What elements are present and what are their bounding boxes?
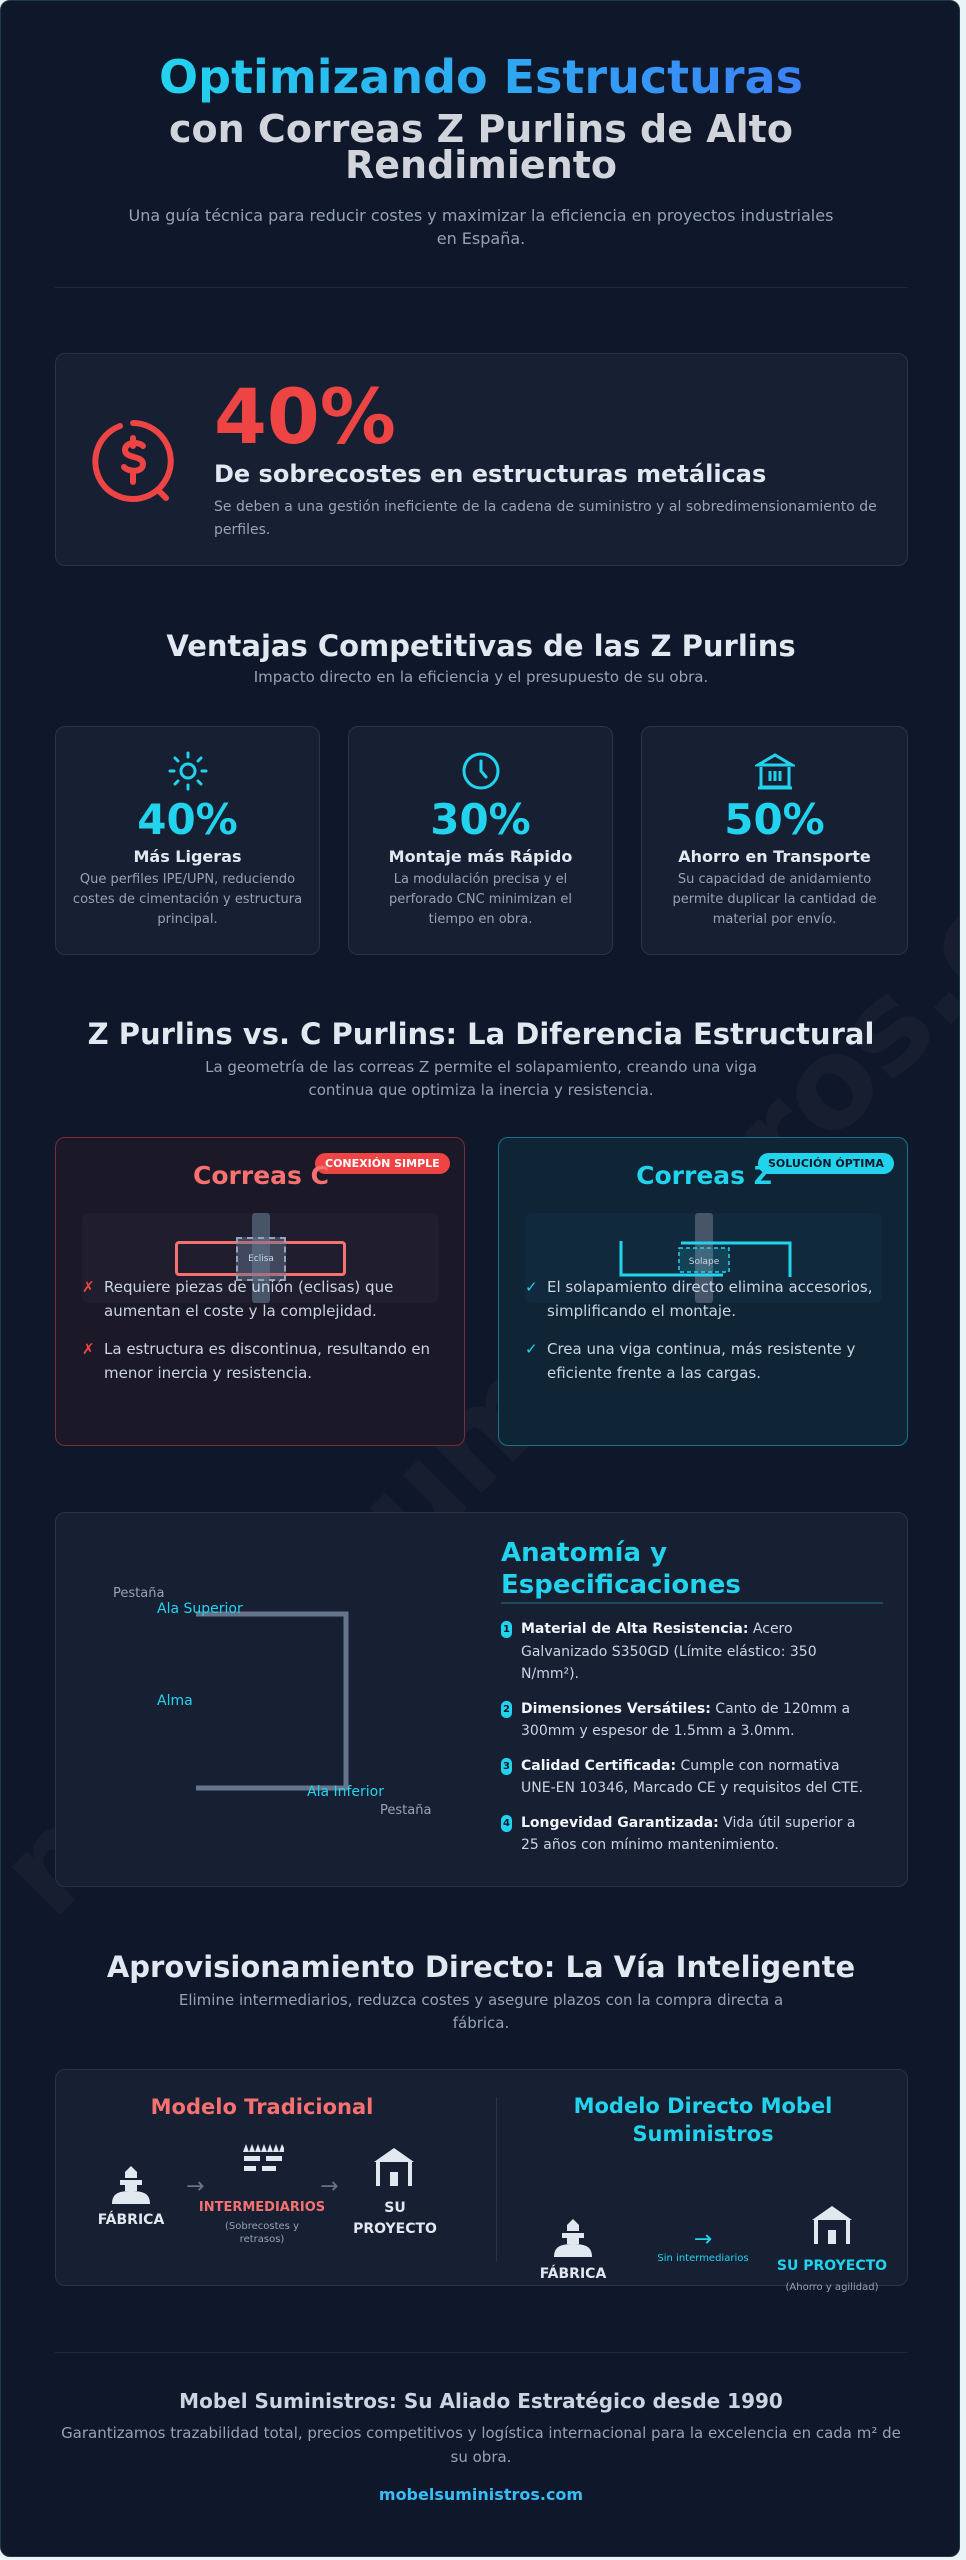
icon: sun [168,752,208,790]
section heading: ventajas: Impacto directo en la eficiencia y el presupuesto de su obra. [254,668,708,686]
panel: flow comparison [55,2069,908,2286]
icon: intermediaries [243,2144,284,2171]
bullets: ✓ [525,1340,538,1358]
heading: Especificaciones [501,1570,741,1600]
badge: CONEXIÓN SIMPLE [325,1157,440,1170]
card: transporte: Su capacidad de anidamiento permite duplicar la cantidad de material por envío. [672,872,877,927]
direct model [540,2094,887,2293]
bullets: ✗ [82,1340,95,1358]
card: más ligeras: 40% [137,795,238,844]
diagram: Z profile: Ala Inferior [307,1784,384,1800]
title: Optimizando Estructuras [159,50,803,104]
panel: anatomía [55,1512,908,1887]
card: montaje: La modulación precisa y el perforado CNC minimizan el tiempo en obra. [389,872,572,927]
traditional model: Modelo Tradicional [151,2095,373,2119]
traditional model: PROYECTO [353,2221,437,2237]
direct model: Sin intermediarios [657,2253,749,2264]
badge [758,1153,894,1174]
badge [315,1153,450,1174]
card: montaje [348,726,613,955]
section heading: aprovisionamiento: Aprovisionamiento Directo: La Vía Inteligente [107,1950,855,1984]
card: más ligeras [55,726,320,955]
heading: Correas C [193,1161,329,1190]
spec list: 2 [503,1704,510,1714]
section heading: Z vs C: Z Purlins vs. C Purlins: La Diferencia Estructural [88,1017,874,1051]
section heading: Z vs C [88,1017,874,1099]
diagram Z: Solape [689,1257,720,1267]
footer [61,2389,901,2504]
section heading: aprovisionamiento [107,1950,855,2032]
diagram C: Eclisa [248,1254,274,1264]
spec list: Material de Alta Resistencia: Acero Galvanizado S350GD (Límite elástico: 350 N/mm²). [521,1621,817,1682]
traditional model [98,2095,437,2245]
bullets: ✗ [82,1278,95,1296]
spec list: Calidad Certificada: Cumple con normativa UNE-EN 10346, Marcado CE y requisitos del CTE. [521,1758,863,1796]
icon: factory [112,2166,150,2204]
traditional model: → [186,2174,204,2199]
bullets: El solapamiento directo elimina accesorios, simplificando el montaje. [547,1278,872,1320]
big number: 40% [214,372,396,461]
heading: Anatomía y [501,1538,667,1568]
icon: project house [812,2206,852,2244]
section heading: Z vs C: La geometría de las correas Z permite el solapamiento, creando una viga continua que optimiza la inercia y resistencia. [205,1058,757,1099]
heading: Correas Z [636,1161,772,1190]
spec list: 1 [503,1624,510,1635]
footer: mobelsuministros.com [379,2485,583,2504]
card: transporte [641,726,908,955]
badge: SOLUCIÓN ÓPTIMA [768,1157,884,1170]
direct model: → [694,2227,712,2252]
diagram: Z profile [113,1586,431,1818]
icon: clock [462,752,500,790]
icon: project house [374,2148,414,2186]
traditional model: → [320,2174,338,2199]
subtitle: Una guía técnica para reducir costes y maximizar la eficiencia en proyectos industriales en España. [129,206,833,248]
diagram C [82,1213,439,1303]
footer: Mobel Suministros: Su Aliado Estratégico desde 1990 [179,2389,783,2413]
spec list: Longevidad Garantizada: Vida útil superior a 25 años con mínimo mantenimiento. [521,1814,856,1853]
diagram: Z profile: Pestaña [380,1803,431,1818]
text: (Ahorro y agilidad) [786,2282,878,2293]
card: más ligeras: Más Ligeras [133,847,242,866]
icon: factory [554,2219,592,2257]
bullets: Requiere piezas de unión (eclisas) que aumentan el coste y la complejidad. [104,1278,393,1320]
traditional model: FÁBRICA [98,2212,164,2228]
traditional model: SU [384,2200,406,2216]
stat panel: 40% sobrecostes [55,353,908,566]
card: transporte: 50% [724,795,825,844]
title [159,50,803,187]
section heading: ventajas: Ventajas Competitivas de las Z Purlins [166,629,796,663]
direct model: SU PROYECTO [777,2258,887,2274]
panel: correas C [55,1137,465,1446]
heading [501,1538,741,1600]
section heading: aprovisionamiento: Elimine intermediarios, reduzca costes y asegure plazos con la compra directa a fábrica. [179,1991,783,2032]
card: transporte: Ahorro en Transporte [678,847,871,866]
spec list: Dimensiones Versátiles: Canto de 120mm a 300mm y espesor de 1.5mm a 3.0mm. [521,1700,850,1739]
stat description: Se deben a una gestión ineficiente de la cadena de suministro y al sobredimensionamiento de perfiles. [214,499,877,538]
bullets: ✓ [525,1278,538,1296]
bullets: Crea una viga continua, más resistente y eficiente frente a las cargas. [547,1340,855,1382]
footer: Garantizamos trazabilidad total, precios competitivos y logística internacional para la excelencia en cada m² de su obra. [61,2424,901,2466]
section heading: ventajas [166,629,796,686]
spec list: 4 [503,1818,510,1828]
bullets [525,1278,872,1382]
card: más ligeras: Que perfiles IPE/UPN, reduciendo costes de cimentación y estructura principal. [73,872,302,927]
direct model: FÁBRICA [540,2266,606,2282]
spec list [501,1621,863,1853]
card: montaje: Montaje más Rápido [389,847,572,866]
traditional model: INTERMEDIARIOS [199,2200,325,2215]
direct model: Modelo Directo Mobel Suministros [574,2094,832,2146]
title: con Correas Z Purlins de Alto Rendimiento [169,107,793,187]
icon: dollar circle [92,420,174,502]
diagram Z [525,1213,882,1303]
stat heading: De sobrecostes en estructuras metálicas [214,460,766,488]
bullets [82,1278,430,1382]
spec list: 3 [503,1760,510,1772]
diagram: Z profile: Alma [157,1693,193,1709]
traditional model: (Sobrecostes y retrasos) [225,2221,299,2245]
card: montaje: 30% [430,795,531,844]
icon: warehouse [755,753,795,790]
diagram: Z profile: Pestaña [113,1586,164,1601]
diagram: Z profile: Ala Superior [157,1601,243,1617]
bullets: La estructura es discontinua, resultando en menor inercia y resistencia. [104,1340,430,1382]
panel: correas Z [498,1137,908,1446]
